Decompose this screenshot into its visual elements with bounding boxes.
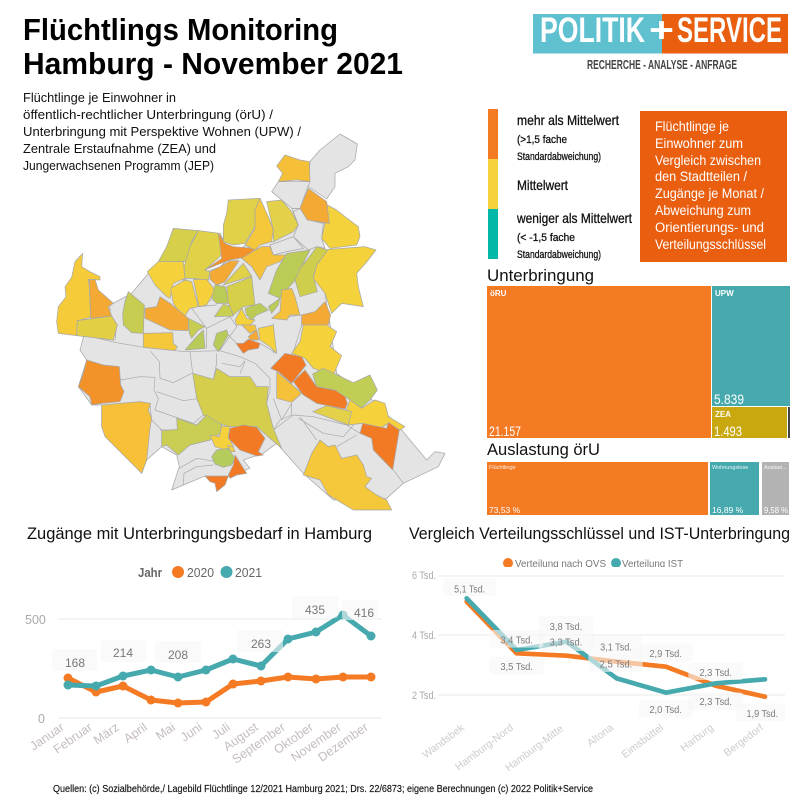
chart legend: Jahr	[138, 566, 162, 580]
data labels: 3,3 Tsd.	[550, 637, 582, 648]
data labels: 2,3 Tsd.	[699, 697, 732, 708]
district axis labels: Bergedorf	[722, 722, 766, 759]
logo: +	[649, 11, 674, 50]
callout: orange description box	[640, 111, 787, 262]
line chart: Zugänge	[25, 566, 382, 767]
district axis labels: Hamburg-Nord	[453, 722, 516, 773]
district axis labels: Eimsbüttel	[619, 722, 666, 761]
chart legend	[503, 558, 683, 567]
treemap: Auslastung	[487, 462, 789, 515]
heading: Zugänge: Zugänge mit Unterbringungsbedarf in Hamburg	[27, 524, 372, 543]
line chart: Vergleich: 6 Tsd.	[412, 570, 436, 582]
callout: orange description box: Verteilungsschlüssel	[655, 237, 766, 252]
map description text: Jungerwachsenen Programm (JEP)	[23, 158, 214, 173]
month axis labels: Februar	[51, 720, 95, 757]
map description text: Flüchtlinge je Einwohner in	[23, 90, 176, 105]
treemap: Unterbringung: 5.839	[714, 391, 744, 407]
month axis labels: August	[221, 720, 261, 754]
treemap: Unterbringung: 21.157	[489, 423, 521, 439]
month axis labels: Dezember	[315, 720, 371, 765]
callout: orange description box: Zugänge je Monat /	[655, 186, 764, 201]
line chart: Vergleich	[412, 558, 785, 774]
treemap: Auslastung: Auslast...	[764, 465, 787, 471]
data labels: 2,3 Tsd.	[699, 668, 732, 679]
chart legend	[138, 566, 262, 580]
month axis labels: Juli	[209, 720, 233, 742]
month axis labels: April	[121, 720, 150, 746]
district axis labels: Altona	[585, 722, 616, 749]
district boundaries	[84, 300, 403, 485]
chart legend: 2021	[235, 566, 262, 580]
treemap: Auslastung: Wohnungslose	[712, 465, 748, 471]
treemap: Auslastung: 16,89 %	[712, 505, 744, 515]
data labels: 2,5 Tsd.	[600, 660, 632, 671]
data labels: 208	[168, 648, 188, 662]
month axis labels: Juni	[178, 720, 205, 745]
data labels: 3,4 Tsd.	[500, 635, 533, 646]
district axis labels: Hamburg-Mitte	[503, 723, 566, 774]
data labels: 5,1 Tsd.	[454, 584, 485, 595]
treemap: Unterbringung: UPW	[715, 289, 734, 298]
data labels: 435	[305, 603, 325, 617]
treemap: Auslastung: 73,53 %	[489, 505, 521, 515]
legend: colour scale: Standardabweichung)	[517, 249, 601, 261]
legend: colour scale: weniger als Mittelwert	[516, 210, 632, 226]
map description text	[23, 90, 301, 173]
chart legend: 2020	[187, 566, 214, 580]
line chart: Zugänge: 0	[38, 712, 45, 726]
legend: colour scale: mehr als Mittelwert	[517, 112, 619, 128]
heading: Unterbringung: Unterbringung	[487, 266, 594, 285]
title	[23, 12, 403, 81]
month axis labels: März	[91, 720, 122, 747]
data labels: 3,8 Tsd.	[550, 622, 582, 633]
callout: orange description box: Abweichung zum	[655, 203, 751, 218]
treemap: Unterbringung: ZEA	[715, 410, 731, 419]
legend: colour scale: Mittelwert	[517, 177, 568, 193]
data labels: 3,1 Tsd.	[600, 642, 632, 653]
month axis labels	[27, 720, 371, 767]
line chart: Vergleich: 4 Tsd.	[412, 630, 436, 642]
month axis labels: Januar	[27, 720, 67, 753]
heading: Auslastung örU: Auslastung örU	[487, 440, 600, 459]
chart legend: Verteilung nach OVS	[515, 558, 606, 570]
treemap: Unterbringung	[487, 286, 790, 439]
coloured districts	[57, 155, 405, 510]
footer: sources: Quellen: (c) Sozialbehörde,/ Lagebild Flüchtlinge 12/2021 Hamburg 2021; Drs. 22/6873; eigene Berechnungen (c) 2022 Politik+Service	[53, 784, 593, 795]
title: Flüchtlings Monitoring	[23, 12, 338, 47]
data labels: 263	[251, 637, 271, 651]
map description text: Unterbringung mit Perspektive Wohnen (UPW) /	[23, 124, 301, 139]
legend: colour scale: (< -1,5 fache	[517, 232, 575, 244]
logo: POLITIK	[540, 11, 645, 50]
treemap: Unterbringung: öRU	[490, 289, 507, 298]
callout: orange description box: Vergleich zwischen	[655, 153, 761, 168]
callout: orange description box: Flüchtlinge je	[655, 119, 729, 134]
month axis labels: November	[288, 720, 344, 765]
data labels: 2,9 Tsd.	[649, 649, 682, 660]
map description text: öffentlich-rechtlicher Unterbringung (örU) /	[23, 107, 273, 122]
treemap: Auslastung: Flüchtlinge	[489, 465, 516, 471]
treemap: Unterbringung: 1.493	[714, 423, 742, 439]
data labels	[52, 596, 378, 671]
data labels: 416	[354, 606, 374, 620]
title: Hamburg - November 2021	[23, 46, 403, 81]
district axis labels: Harburg	[678, 722, 716, 754]
month axis labels: Oktober	[271, 720, 316, 757]
map of Hamburg districts	[57, 134, 445, 510]
line chart: Zugänge: 500	[25, 613, 46, 627]
district axis labels: Wandsbek	[420, 721, 467, 761]
month axis labels: Mai	[153, 720, 178, 743]
treemap: Auslastung: 9,58 %	[764, 505, 788, 515]
chart legend: Verteilung IST	[622, 558, 684, 570]
logo	[533, 11, 788, 72]
month axis labels: September	[230, 720, 288, 767]
data labels: 214	[113, 646, 133, 660]
data labels	[454, 584, 778, 720]
data labels: 1,9 Tsd.	[746, 709, 778, 720]
data labels: 2,0 Tsd.	[649, 705, 682, 716]
callout: orange description box: Einwohner zum	[655, 136, 743, 151]
line chart: Vergleich: 2 Tsd.	[412, 690, 436, 702]
legend: colour scale: Standardabweichung)	[517, 151, 601, 163]
callout: orange description box: Orientierungs- und	[655, 220, 764, 235]
map description text: Zentrale Erstaufnahme (ZEA) und	[23, 141, 216, 156]
data labels: 3,5 Tsd.	[500, 662, 533, 673]
data labels: 168	[65, 656, 85, 670]
district base shape	[78, 134, 445, 500]
callout: orange description box: den Stadtteilen /	[655, 169, 747, 184]
legend: colour scale: (>1,5 fache	[517, 134, 567, 146]
legend: colour scale	[488, 109, 632, 261]
district axis labels	[420, 721, 766, 774]
